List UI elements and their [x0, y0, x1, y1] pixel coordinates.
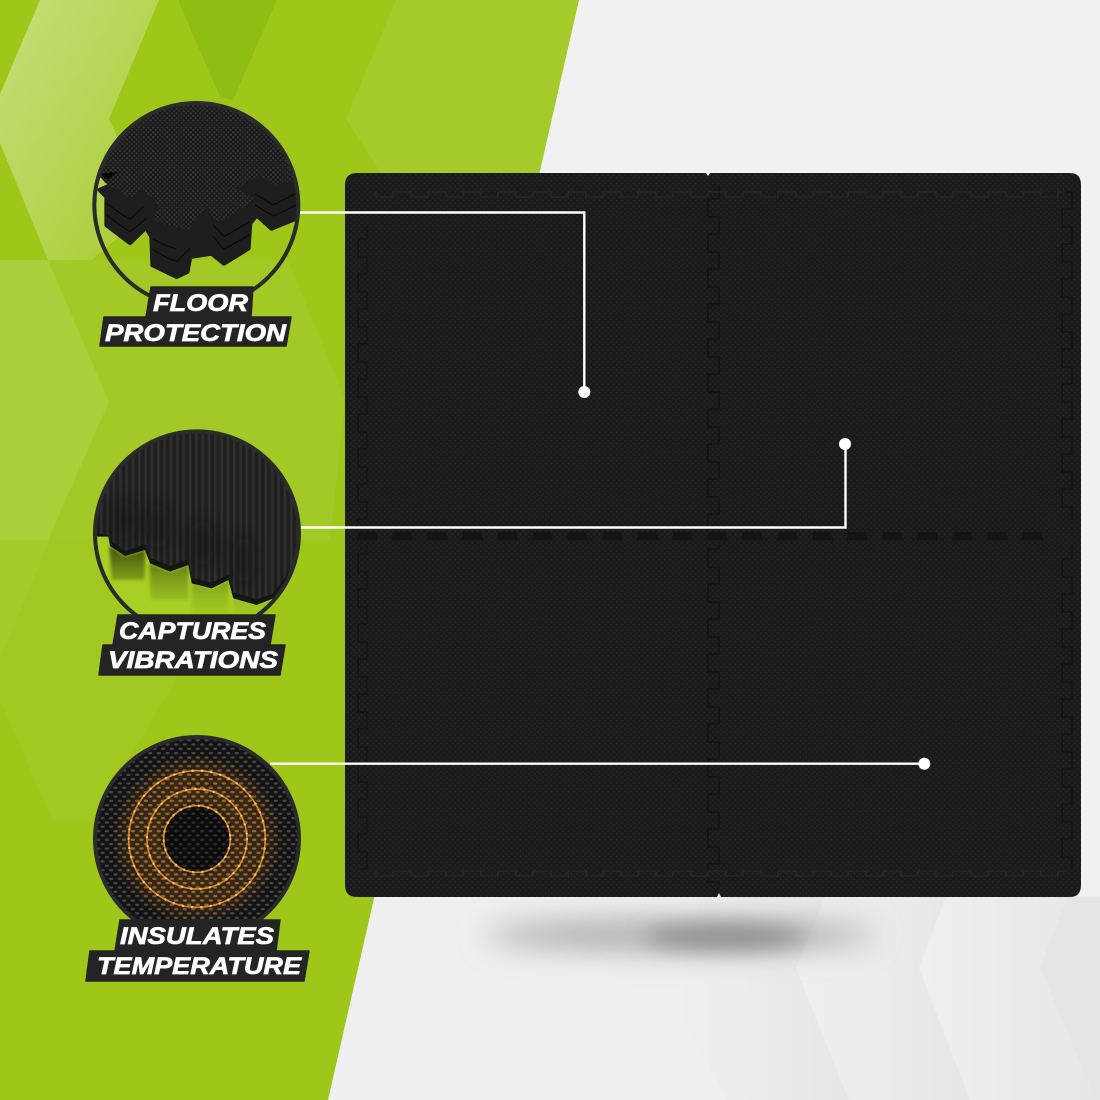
label box: captures vibrations	[99, 615, 285, 675]
label box: insulates temperature	[86, 920, 309, 981]
mat tile: top left	[345, 173, 708, 530]
floor shadow	[485, 920, 875, 950]
label text: CAPTURES: CAPTURES	[119, 618, 266, 645]
leader line: floor protection	[299, 212, 590, 398]
interlocking floor mat	[345, 173, 1081, 897]
mat interlocking edges	[350, 173, 1074, 897]
mat tile: bottom right	[719, 528, 1081, 897]
label box: floor protection	[100, 287, 291, 347]
mat tile: top right	[708, 173, 1081, 530]
icon: stacked mat corner in circle	[92, 101, 300, 298]
icon: ribbed mat edge in circle	[93, 429, 301, 614]
background: green diagonal panel	[0, 0, 579, 1100]
label text: FLOOR: FLOOR	[153, 290, 249, 317]
feature: floor protection	[87, 97, 307, 347]
label text: INSULATES: INSULATES	[120, 923, 274, 950]
leader line: insulates temperature	[270, 758, 930, 770]
feature: captures vibrations	[87, 420, 307, 675]
label text: PROTECTION: PROTECTION	[105, 320, 287, 347]
label text: TEMPERATURE: TEMPERATURE	[97, 953, 302, 980]
leader line: captures vibrations	[300, 438, 851, 528]
mat tile: bottom left	[345, 528, 719, 897]
icon: heat rings on mat in circle	[93, 735, 301, 920]
feature: insulates temperature	[86, 732, 309, 981]
label text: VIBRATIONS: VIBRATIONS	[108, 647, 278, 674]
